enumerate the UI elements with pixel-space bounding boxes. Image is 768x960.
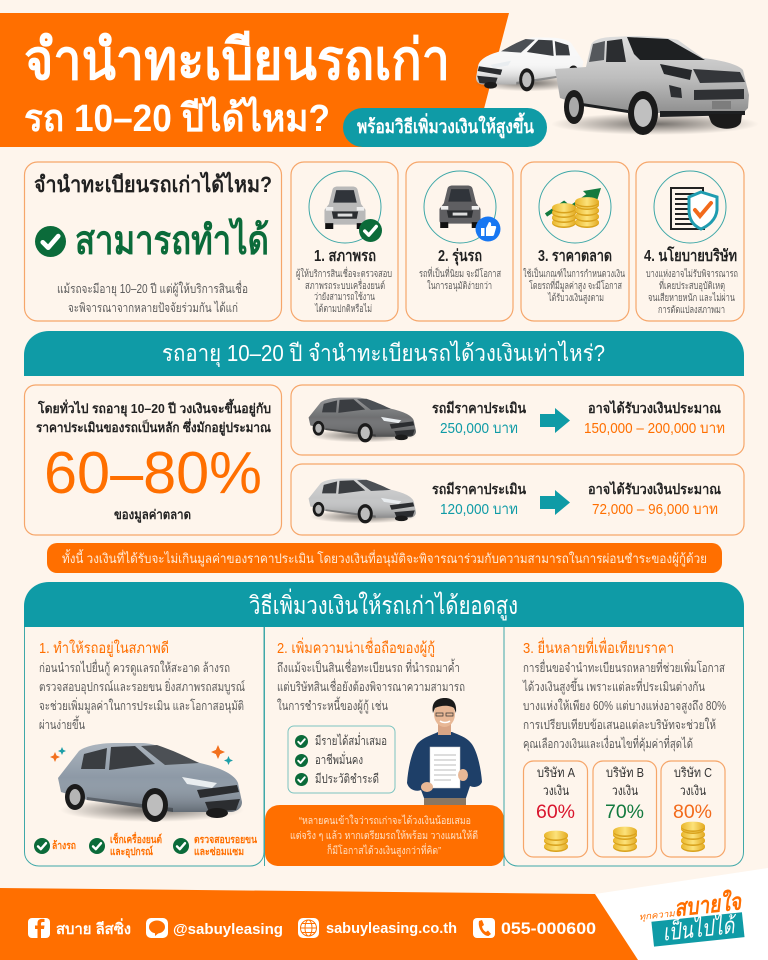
header banner [0, 13, 759, 147]
pill: subtitle tag: พร้อมวิธีเพิ่มวงเงินให้สูงขึ้น [357, 112, 534, 139]
factor description: โดยรถที่มีมูลค่าสูง จะมีโอกาส [529, 278, 622, 292]
slogan: สบายใจ [673, 887, 743, 921]
loan amount: 150,000 – 200,000 บาท [584, 420, 725, 437]
panel: tip 3 [504, 627, 744, 866]
slogan: ทุกความ [638, 908, 676, 923]
icon: coins and rising arrow [546, 188, 601, 228]
tip text: แต่บริษัทสินเชื่อยังต้องพิจารณาความสามารถ [277, 678, 465, 694]
callout: ก็มีโอกาสได้วงเงินสูงกว่าที่คิด” [327, 843, 441, 857]
illustration: white sedan [475, 38, 583, 91]
loan amount [584, 399, 725, 437]
factor description: ได้ตามปกติหรือไม่ [314, 303, 372, 315]
factor title: 4. นโยบายบริษัท [644, 245, 737, 265]
factor description: สภาพรถระบบเครื่องยนต์ [305, 278, 385, 292]
panel: factor 3 market price [521, 162, 629, 321]
tip text [39, 659, 245, 732]
loan amount: อาจได้รับวงเงินประมาณ [588, 480, 721, 497]
tip text: ผ่านง่ายขึ้น [39, 715, 85, 732]
panel: can it be done [24, 162, 282, 321]
note text [57, 280, 248, 315]
panel: loan percent [24, 385, 282, 535]
company card C: บริษัท C [674, 765, 712, 780]
subtitle: รถ 10–20 ปีได้ไหม? [24, 96, 330, 140]
factor description [419, 266, 501, 292]
icon: suv with check [324, 186, 382, 242]
factor description: รถที่เป็นที่นิยม จะมีโอกาส [419, 266, 501, 280]
tip text: การเปรียบเทียบข้อเสนอแต่ละบริษัทจะช่วยให้ [523, 718, 716, 732]
section header: how much: รถอายุ 10–20 ปี จำนำทะเบียนรถได้วงเงินเท่าไหร่? [162, 340, 605, 367]
answer: สามารถทำได้ [75, 217, 269, 263]
checklist: scratches: และซ่อมแซม [194, 846, 244, 858]
checklist: engine: เช็กเครื่องยนต์ [110, 831, 162, 846]
panel: factor 2 model [406, 162, 513, 321]
checklist box: อาชีพมั่นคง [315, 751, 363, 767]
car photo [309, 398, 417, 442]
company card C [661, 761, 725, 857]
company card B: บริษัท B [606, 765, 644, 780]
factor description [523, 266, 625, 304]
arrow [540, 490, 570, 515]
tip text [522, 659, 726, 752]
section header: how to raise [24, 582, 744, 627]
note bar: ทั้งนี้ วงเงินที่ได้รับจะไม่เกินมูลค่าของราคาประเมิน โดยวงเงินที่อนุมัติจะพิจารณาร่วมกับความสามารถในการผ่อนชำระของผู้กู้ด้วย [62, 549, 707, 567]
contact: facebook [28, 918, 131, 938]
panel: tip 2 [264, 627, 504, 866]
tip text: ตรวจสอบอุปกรณ์และรอยขน ยิ่งสภาพรถสมบูรณ์ [39, 678, 245, 695]
checklist box [288, 726, 395, 793]
footer band [0, 888, 638, 960]
company card B: วงเงิน [612, 783, 638, 798]
tip text: คุณเลือกวงเงินและเงื่อนไขที่คุ้มค่าที่สุดได้ [523, 735, 693, 752]
tip heading: 3. ยื่นหลายที่เพื่อเทียบราคา [523, 637, 674, 657]
slogan [637, 887, 746, 948]
factor title: 3. ราคาตลาด [538, 248, 612, 265]
company card A: 60% [536, 802, 575, 823]
factor title: 1. สภาพรถ [314, 248, 376, 265]
checklist: scratches: ตรวจสอบรอยขน [194, 834, 258, 846]
panel: factor 1 condition [291, 162, 398, 321]
contact: line [146, 918, 283, 938]
checklist: clean: ล้างรถ [52, 839, 76, 852]
white corner [595, 868, 768, 960]
percent caption: ของมูลค่าตลาด [114, 507, 191, 523]
icon: document with shield [670, 187, 717, 230]
section header: how to raise: วิธีเพิ่มวงเงินให้รถเก่าได้ยอดสูง [249, 588, 518, 621]
factor description: ว่ายังสามารถใช้งาน [314, 291, 375, 303]
tip heading: 2. เพิ่มความน่าเชื่อถือของผู้กู้ [277, 637, 435, 657]
tip text: ถึงแม้จะเป็นสินเชื่อทะเบียนรถ ที่นำรถมาค้ำ [277, 658, 460, 675]
appraisal: รถมีราคาประเมิน [432, 400, 526, 416]
company card A: บริษัท A [537, 765, 575, 780]
company card C: 80% [673, 802, 712, 823]
callout: แต่จริง ๆ แล้ว หากเตรียมรถให้พร้อม วางแผนให้ดี [290, 829, 478, 842]
section header: how much [24, 331, 744, 376]
person with document [407, 698, 482, 805]
factor description: ที่เคยประสบอุบัติเหตุ [659, 278, 725, 292]
tip text: ในการชำระหนี้ของผู้กู้ เช่น [277, 696, 388, 714]
title: จำนำทะเบียนรถเก่า [24, 28, 450, 91]
panel heading: จำนำทะเบียนรถเก่าได้ไหม? [34, 171, 272, 197]
footer [0, 868, 768, 960]
factor description: บางแห่งอาจไม่รับพิจารณารถ [646, 268, 738, 280]
contact: website: sabuyleasing.co.th [326, 920, 457, 937]
factor description [296, 266, 392, 315]
note bar [47, 543, 722, 573]
checklist: scratches [173, 834, 258, 858]
checklist: engine [89, 831, 162, 859]
intro text [36, 398, 271, 436]
appraisal: 250,000 บาท [440, 420, 518, 437]
appraisal [432, 400, 526, 437]
company card C: วงเงิน [680, 783, 706, 798]
loan amount: 72,000 – 96,000 บาท [592, 501, 718, 518]
company card A [524, 761, 588, 857]
tip text: ก่อนนำรถไปยื่นกู้ ควรดูแลรถให้สะอาด ล้างรถ [39, 659, 230, 676]
intro text: โดยทั่วไป รถอายุ 10–20 ปี วงเงินจะขึ้นอยู่กับ [37, 398, 271, 417]
contact: phone: 055-000600 [501, 919, 596, 938]
company card B [593, 761, 656, 857]
pill: subtitle tag [343, 108, 547, 147]
company card B: 70% [605, 802, 644, 823]
contact: line: @sabuyleasing [173, 921, 283, 938]
panel: tip 1 [24, 627, 264, 866]
factor description: ได้รับวงเงินสูงตาม [547, 292, 604, 304]
illustration: silver pickup [551, 36, 759, 135]
checklist: clean [34, 838, 76, 854]
checklist box: มีรายได้สม่ำเสมอ [315, 732, 387, 748]
appraisal [432, 481, 526, 518]
contact: website [298, 918, 457, 938]
car photo [309, 479, 417, 523]
panel: example 1 [291, 385, 744, 455]
arrow [540, 408, 570, 433]
tip heading: 1. ทำให้รถอยู่ในสภาพดี [39, 639, 169, 657]
note text: แม้รถจะมีอายุ 10–20 ปี แต่ผู้ให้บริการสินเชื่อ [57, 280, 248, 297]
factor description: ใช้เป็นเกณฑ์ในการกำหนดวงเงิน [523, 266, 625, 280]
factor description [646, 268, 738, 316]
appraisal: 120,000 บาท [440, 501, 518, 518]
factor description: ผู้ให้บริการสินเชื่อจะตรวจสอบ [296, 266, 392, 280]
contact: facebook: สบาย ลีสซิ่ง [56, 918, 131, 938]
icon: hatchback with thumbs up [439, 185, 500, 242]
big percent: 60–80% [44, 440, 262, 506]
checklist: engine: และอุปกรณ์ [110, 845, 153, 859]
factor description: ในการอนุมัติง่ายกว่า [427, 280, 492, 292]
car photo with sparkles [50, 743, 244, 822]
loan amount: อาจได้รับวงเงินประมาณ [588, 399, 721, 416]
callout [265, 805, 504, 866]
factor description: จนเสียหายหนัก และไม่ผ่าน [648, 292, 735, 304]
slogan: เป็นไปได้ [661, 911, 739, 946]
intro text: ราคาประเมินของรถเป็นหลัก ซึ่งมักอยู่ประมาณ [36, 418, 271, 436]
panel: factor 4 company policy [636, 162, 744, 321]
checklist box: มีประวัติชำระดี [315, 772, 379, 786]
tip text: ได้วงเงินสูงขึ้น เพราะแต่ละที่ประเมินต่างกัน [522, 677, 705, 695]
loan amount [588, 480, 721, 518]
tip text [277, 658, 465, 714]
company card A: วงเงิน [543, 783, 569, 798]
tip text: จะช่วยเพิ่มมูลค่าในการประเมิน และโอกาสอนุมัติ [39, 697, 244, 714]
note text: จะพิจารณาจากหลายปัจจัยร่วมกัน ได้แก่ [68, 301, 238, 315]
banner shape [0, 13, 509, 147]
factor title: 2. รุ่นรถ [438, 248, 482, 266]
panel: example 2 [291, 464, 744, 535]
icon: green check [35, 226, 66, 257]
factor description: การดัดแปลงสภาพมา [658, 305, 725, 316]
callout: “หลายคนเข้าใจว่ารถเก่าจะได้วงเงินน้อยเสมอ [299, 814, 471, 827]
appraisal: รถมีราคาประเมิน [432, 481, 526, 497]
